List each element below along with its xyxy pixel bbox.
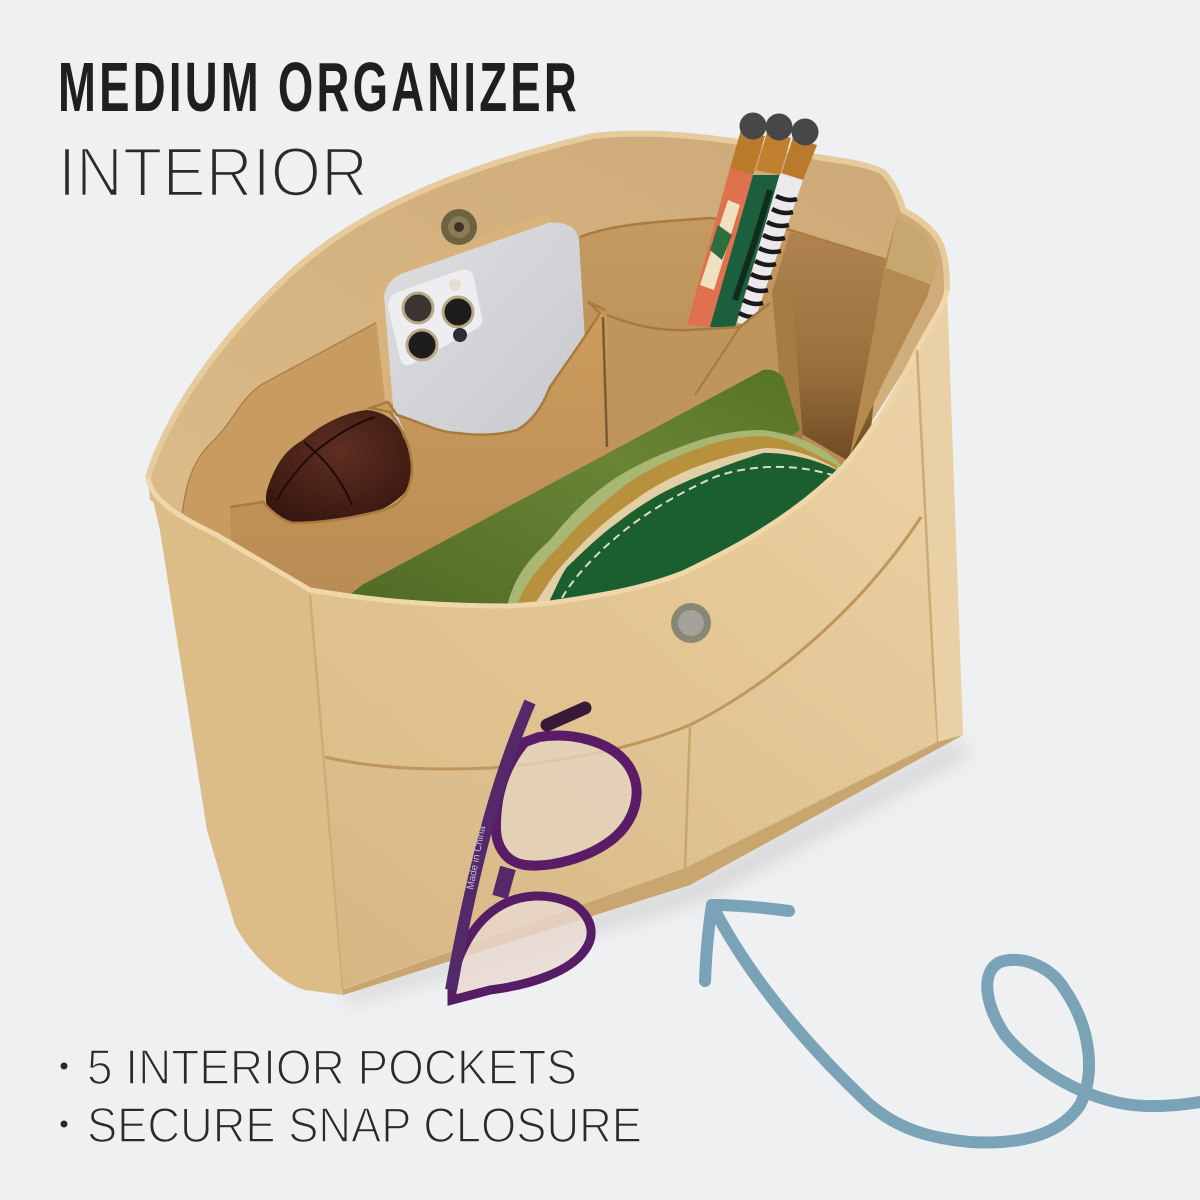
phone [375, 213, 585, 440]
bullet: closure: SECURE SNAP CLOSURE [87, 1099, 642, 1153]
right gusset [850, 217, 937, 455]
bullet: pockets: 5 INTERIOR POCKETS [87, 1041, 577, 1095]
feature list [60, 1041, 642, 1153]
ground shadow [340, 742, 972, 1002]
pencils [687, 112, 818, 327]
right back pocket [607, 292, 803, 470]
front interior pockets [230, 302, 607, 598]
bottom lens [452, 896, 591, 1000]
back wall pocket panel [183, 218, 887, 605]
right dark compartment [772, 232, 887, 462]
title: MEDIUM ORGANIZER [58, 48, 580, 126]
egg object [266, 410, 413, 528]
green zip pouch [507, 430, 843, 610]
striped pencil [737, 173, 803, 325]
organizer bag illustration [148, 112, 972, 1002]
ferrules [730, 130, 765, 175]
bag interior lining [148, 134, 947, 605]
bottom edge shade [343, 735, 963, 995]
left back pocket fill [183, 323, 415, 600]
icon: back snap [441, 209, 477, 245]
bridge [500, 868, 508, 897]
rim and seams [148, 290, 947, 606]
title [58, 48, 580, 211]
erasers [740, 112, 766, 140]
top lens [496, 736, 637, 866]
temple imprint: Made in China [465, 825, 488, 891]
bag front panel [148, 290, 963, 995]
back pocket seam [183, 218, 887, 513]
icon: front snap [671, 603, 711, 643]
temple arm [451, 702, 530, 990]
green notebook [347, 370, 800, 606]
title: INTERIOR [58, 133, 368, 211]
right side panel [917, 290, 963, 745]
front pocket [325, 517, 937, 988]
rim highlight back [148, 134, 947, 478]
patterned pencil [687, 168, 753, 327]
camera module [388, 270, 482, 365]
glasses [451, 702, 637, 1000]
far temple tip [547, 708, 585, 725]
left side panel [148, 478, 343, 992]
green pencil [710, 175, 780, 327]
arrow [705, 905, 1200, 1143]
